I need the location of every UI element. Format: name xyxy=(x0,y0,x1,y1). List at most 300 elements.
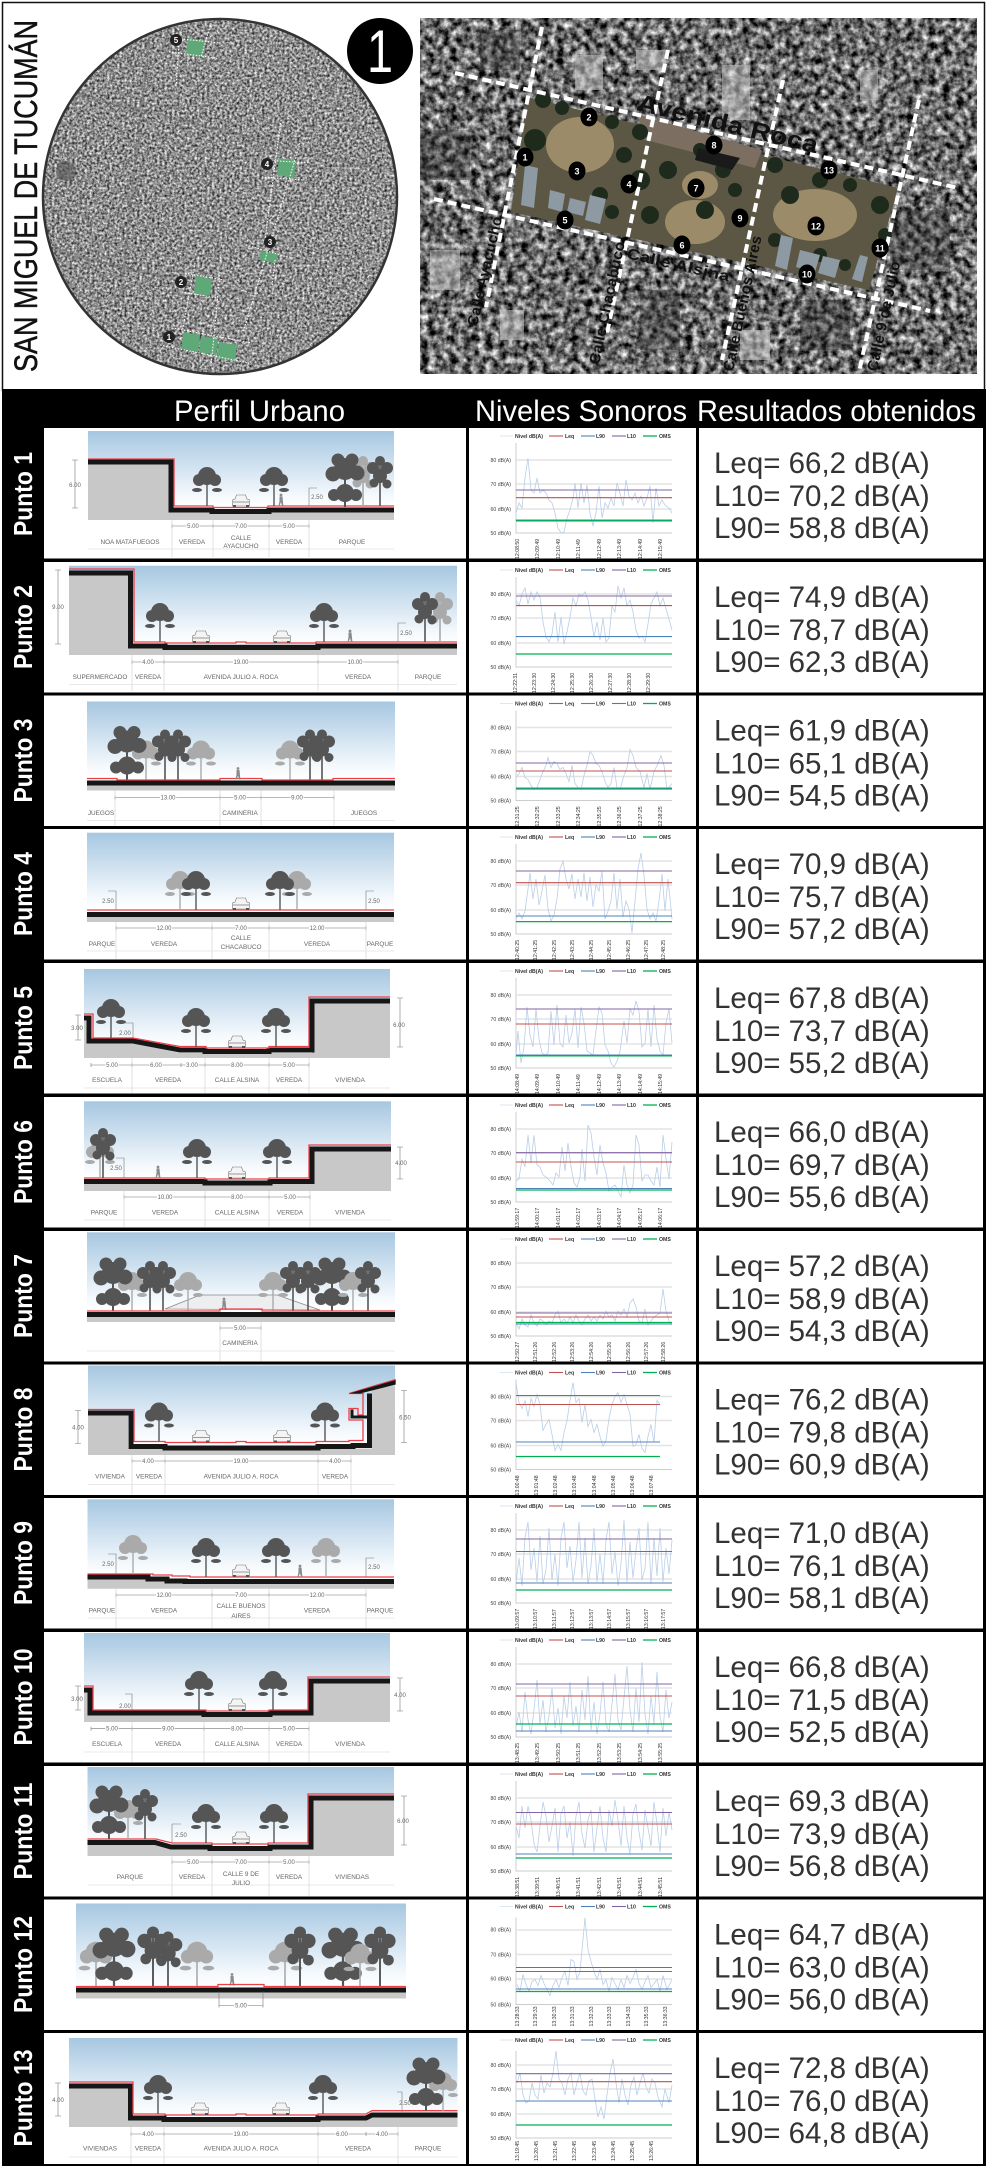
sound level chart 3: 12:32:25 xyxy=(535,806,541,826)
sound level chart 4: 12:44:25 xyxy=(589,940,595,960)
sound level chart 8: 13:07:48 xyxy=(649,1475,655,1496)
sound level chart 12: 80 dB(A) xyxy=(491,1928,511,1934)
sound level chart 2: 12:29:30 xyxy=(646,673,652,693)
results 11: L90= 56,8 dB(A) xyxy=(714,1850,930,1883)
urban profile 10: VIVIENDA xyxy=(335,1741,366,1748)
sound level chart 8: L90 xyxy=(596,1370,605,1376)
results 4: L90= 57,2 dB(A) xyxy=(714,913,930,946)
sound level chart 13: 13:19:45 xyxy=(515,2141,521,2161)
urban profile 2: 9.00 xyxy=(52,605,64,611)
urban profile 6: 2.50 xyxy=(110,1166,122,1172)
results 3 xyxy=(699,696,983,826)
sound level chart 5: 14:11:49 xyxy=(576,1074,582,1094)
urban profile 4: 12.00 xyxy=(309,926,325,932)
sound level chart 7: 12:54:26 xyxy=(589,1342,595,1362)
header row: Perfil Urbano xyxy=(174,395,345,428)
sound level chart 13: 13:25:45 xyxy=(630,2141,636,2161)
sound level chart 9: 13:12:57 xyxy=(570,1609,576,1629)
urban profile 12 xyxy=(44,1900,466,2030)
urban profile 2: VEREDA xyxy=(135,674,162,681)
sound level chart 4: 12:41:25 xyxy=(533,940,539,960)
urban profile 3 xyxy=(44,696,466,826)
urban profile 2: AVENIDA JULIO A. ROCA xyxy=(204,674,279,681)
sound level chart 12: 60 dB(A) xyxy=(491,1976,511,1982)
urban profile 10: 3.00 xyxy=(71,1697,83,1703)
row: Punto 8 xyxy=(8,1364,983,1496)
urban profile 6 xyxy=(44,1097,466,1228)
urban profile 1: 6.00 xyxy=(69,483,81,489)
sound level chart 3: L10 xyxy=(627,702,636,708)
urban profile 9: 12.00 xyxy=(156,1593,172,1599)
sound level chart 6: Leq xyxy=(565,1103,574,1109)
aerial map xyxy=(420,18,977,374)
urban profile 1: PARQUE xyxy=(339,539,365,546)
sound level chart 11: 60 dB(A) xyxy=(491,1845,511,1851)
sound level chart 11: 13:43:51 xyxy=(617,1877,623,1897)
results 12 xyxy=(699,1900,983,2030)
row: Punto 1: Punto 1 xyxy=(8,452,38,536)
sound level chart 1: Leq xyxy=(565,434,574,440)
sound level chart 1: 12:13:49 xyxy=(617,539,623,559)
urban profile 6: 4.00 xyxy=(395,1161,407,1167)
results 4: Leq= 70,9 dB(A) xyxy=(714,848,930,881)
sound level chart 4: 12:47:25 xyxy=(644,940,650,960)
sound level chart 6: 14:03:17 xyxy=(597,1208,603,1228)
sound level chart 3: 12:34:25 xyxy=(576,806,582,826)
sound level chart 9: 13:11:57 xyxy=(552,1609,558,1629)
sound level chart 11: 50 dB(A) xyxy=(491,1869,511,1875)
urban profile 8: AVENIDA JULIO A. ROCA xyxy=(204,1474,279,1480)
aerial markers: 7 xyxy=(693,184,699,194)
sound level chart 10: Nivel dB(A) xyxy=(515,1638,543,1644)
results 12: L10= 63,0 dB(A) xyxy=(714,1952,930,1984)
urban profile 2: PARQUE xyxy=(415,674,441,681)
sound level chart 13: 13:22:45 xyxy=(572,2141,578,2161)
street names: Calle Ayacucho xyxy=(464,215,506,328)
sound level chart 5: 14:10:49 xyxy=(556,1074,562,1094)
sound level chart 5: L90 xyxy=(596,969,605,975)
sound level chart 6: 13:59:17 xyxy=(515,1208,521,1228)
sound level chart 2: 12:25:30 xyxy=(570,673,576,693)
sound level chart 12: 13:35:33 xyxy=(644,2006,650,2026)
results 11: L10= 73,9 dB(A) xyxy=(714,1818,930,1851)
sound level chart 5: Leq xyxy=(565,969,574,975)
sound level chart 11: Nivel dB(A) xyxy=(515,1772,543,1778)
row: Punto 11 xyxy=(8,1766,983,1897)
street names: Avenida Roca xyxy=(635,90,822,159)
urban profile 5: 8.00 xyxy=(231,1063,243,1069)
sound level chart 1: 50 dB(A) xyxy=(491,531,511,537)
urban profile 5: 2.00 xyxy=(119,1031,131,1037)
sound level chart 11: 13:38:51 xyxy=(515,1877,521,1897)
sound level chart 7: 50 dB(A) xyxy=(491,1334,511,1340)
urban profile 2: VEREDA xyxy=(345,674,372,681)
header row: Resultados obtenidos xyxy=(697,395,976,428)
sound level chart 1: 12:10:49 xyxy=(556,539,562,559)
urban profile 1: VEREDA xyxy=(276,539,303,546)
urban profile 2: 19.00 xyxy=(233,660,249,666)
urban profile 4: 2.50 xyxy=(102,899,114,905)
sound level chart 7: L10 xyxy=(627,1237,636,1243)
sound level chart 8: 13:01:48 xyxy=(534,1475,540,1496)
sound level chart 13: L10 xyxy=(627,2038,636,2044)
sound level chart 9: 80 dB(A) xyxy=(491,1528,511,1534)
urban profile 3: CAMINERIA xyxy=(222,810,258,817)
sound level chart 12: 13:34:33 xyxy=(626,2006,632,2026)
sound level chart 2: 12:26:30 xyxy=(589,673,595,693)
row: Punto 6 xyxy=(8,1097,983,1228)
sound level chart 3: 12:31:25 xyxy=(515,806,521,826)
urban profile 9 xyxy=(44,1498,466,1628)
urban profile 5: 6.00 xyxy=(150,1063,162,1069)
results 7: Leq= 57,2 dB(A) xyxy=(714,1250,930,1283)
results 1: Leq= 66,2 dB(A) xyxy=(714,447,930,480)
results 5: L90= 55,2 dB(A) xyxy=(714,1047,930,1080)
results 13: Leq= 72,8 dB(A) xyxy=(714,2052,930,2085)
row: Punto 10 xyxy=(8,1632,983,1763)
sound level chart 1: 12:14:49 xyxy=(638,539,644,559)
sound level chart 9: Leq xyxy=(565,1504,574,1510)
aerial markers: 6 xyxy=(679,240,685,250)
sound level chart 2: 50 dB(A) xyxy=(491,665,511,671)
row: Punto 8: Punto 8 xyxy=(8,1388,38,1472)
sound level chart 10: OMS xyxy=(659,1638,671,1644)
sound level chart 12: L10 xyxy=(627,1904,636,1910)
results 9: L10= 76,1 dB(A) xyxy=(714,1550,930,1583)
aerial markers: 11 xyxy=(875,244,885,254)
header row xyxy=(174,395,976,428)
sound level chart 1: L10 xyxy=(627,434,636,440)
sound level chart 11: L10 xyxy=(627,1772,636,1778)
urban profile 11: PARQUE xyxy=(117,1874,143,1881)
sound level chart 11: 13:42:51 xyxy=(597,1877,603,1897)
row: Punto 13 xyxy=(8,2033,983,2164)
sound level chart 2: 60 dB(A) xyxy=(491,641,511,647)
sound level chart 8: 50 dB(A) xyxy=(491,1468,511,1474)
sound level chart 13: 50 dB(A) xyxy=(491,2136,511,2142)
sound level chart 10: 13:49:25 xyxy=(535,1743,541,1763)
sound level chart 4: 12:42:25 xyxy=(552,940,558,960)
sound level chart 7: Nivel dB(A) xyxy=(515,1237,543,1243)
urban profile 7 xyxy=(44,1231,466,1362)
sound level chart 9: 50 dB(A) xyxy=(491,1601,511,1607)
sound level chart 12: 50 dB(A) xyxy=(491,2002,511,2008)
results 10 xyxy=(699,1632,983,1762)
urban profile 13: 4.00 xyxy=(376,2132,388,2138)
results 7 xyxy=(699,1231,983,1362)
sound level chart 4: 12:48:25 xyxy=(661,940,667,960)
row: Punto 7 xyxy=(8,1231,983,1362)
urban profile 4: PARQUE xyxy=(89,941,115,948)
street lines xyxy=(434,27,958,372)
sound level chart 1: 60 dB(A) xyxy=(491,507,511,513)
sound level chart 2: OMS xyxy=(659,568,671,574)
sound level chart 6: L90 xyxy=(596,1103,605,1109)
urban profile 10: 2.00 xyxy=(119,1704,131,1710)
sound level chart 6: 14:06:17 xyxy=(658,1208,664,1228)
sound level chart 13: Leq xyxy=(565,2038,574,2044)
sound level chart 5: 60 dB(A) xyxy=(491,1042,511,1048)
urban profile 1: 7.00 xyxy=(235,524,247,530)
sound level chart 10: 13:52:25 xyxy=(597,1743,603,1763)
urban profile 8: 4.00 xyxy=(142,1459,154,1465)
sound level chart 12: OMS xyxy=(659,1904,671,1910)
urban profile 11: 7.00 xyxy=(235,1860,247,1866)
sound level chart 10: 13:50:25 xyxy=(556,1743,562,1763)
sound level chart 10: L10 xyxy=(627,1638,636,1644)
aerial markers: 1 xyxy=(522,152,528,162)
urban profile 13: 19.00 xyxy=(233,2132,249,2138)
urban profile 4: 7.00 xyxy=(235,926,247,932)
urban profile 10: 9.00 xyxy=(162,1727,174,1733)
results 6 xyxy=(699,1097,983,1228)
sound level chart 6: 14:00:17 xyxy=(535,1208,541,1228)
urban profile 13: VEREDA xyxy=(135,2146,162,2153)
urban profile 1: CALLE xyxy=(231,535,251,542)
street names: Calle 9 de Julio xyxy=(864,260,904,373)
sound level chart 13: 70 dB(A) xyxy=(491,2087,511,2093)
sound level chart 2: 12:27:30 xyxy=(608,673,614,693)
results 4 xyxy=(699,829,983,960)
urban profile 8: 4.00 xyxy=(72,1426,84,1432)
sound level chart 6: 70 dB(A) xyxy=(491,1151,511,1157)
sound level chart 3: 12:37:25 xyxy=(638,806,644,826)
sound level chart 10: 13:55:25 xyxy=(658,1743,664,1763)
row: Punto 6: Punto 6 xyxy=(8,1120,38,1204)
sound level chart 3 xyxy=(469,696,696,826)
sound level chart 9: 13:14:57 xyxy=(607,1609,613,1629)
sound level chart 9: 13:16:57 xyxy=(644,1609,650,1629)
row: Punto 7: Punto 7 xyxy=(8,1254,38,1338)
sound level chart 3: 70 dB(A) xyxy=(491,750,511,756)
sound level chart 3: Leq xyxy=(565,702,574,708)
urban profile 9: VEREDA xyxy=(304,1608,331,1614)
results 4: L10= 75,7 dB(A) xyxy=(714,881,930,914)
sound level chart 2: 12:22:31 xyxy=(513,673,519,693)
sound level chart 3: OMS xyxy=(659,702,671,708)
sound level chart 9: 70 dB(A) xyxy=(491,1552,511,1558)
urban profile 5: CALLE ALSINA xyxy=(215,1077,260,1084)
row: Punto 2: Punto 2 xyxy=(8,585,38,669)
results 9 xyxy=(699,1498,983,1628)
sound level chart 12: 13:29:33 xyxy=(533,2006,539,2026)
results 5: Leq= 67,8 dB(A) xyxy=(714,982,930,1015)
results 11: Leq= 69,3 dB(A) xyxy=(714,1785,930,1818)
sound level chart 2: 12:28:30 xyxy=(627,673,633,693)
sound level chart 5: 14:13:49 xyxy=(617,1074,623,1094)
sound level chart 8: OMS xyxy=(659,1370,671,1376)
sound level chart 13: 13:23:45 xyxy=(592,2141,598,2161)
urban profile 1: NOA MATAFUEGOS xyxy=(100,539,160,546)
panel: location maps xyxy=(2,2,984,390)
sound level chart 13: 13:21:45 xyxy=(553,2141,559,2161)
sound level chart 1: 12:15:49 xyxy=(658,539,664,559)
sound level chart 11: 13:41:51 xyxy=(576,1877,582,1897)
urban profile 3: 9.00 xyxy=(291,796,303,802)
row: Punto 2 xyxy=(8,562,983,693)
sound level chart 9: 13:10:57 xyxy=(533,1609,539,1629)
sound level chart 8: 13:02:48 xyxy=(553,1475,559,1496)
sound level chart 3: L90 xyxy=(596,702,605,708)
sound level chart 3: 12:35:25 xyxy=(597,806,603,826)
sound level chart 9: 13:15:57 xyxy=(626,1609,632,1629)
urban profile 4: 12.00 xyxy=(156,926,172,932)
aerial markers: 4 xyxy=(626,180,632,190)
sound level chart 11: 13:44:51 xyxy=(638,1877,644,1897)
results 3: Leq= 61,9 dB(A) xyxy=(714,714,930,748)
urban profile 6: 8.00 xyxy=(231,1195,243,1201)
urban profile 10: 5.00 xyxy=(106,1727,118,1733)
sound level chart 2 xyxy=(469,562,696,693)
sound level chart 7: 12:57:26 xyxy=(644,1342,650,1362)
row: Punto 3 xyxy=(8,696,983,826)
urban profile 10: 5.00 xyxy=(283,1727,295,1733)
sound level chart 5: 14:14:49 xyxy=(638,1074,644,1094)
sound level chart 11: 70 dB(A) xyxy=(491,1820,511,1826)
urban profile 4: VEREDA xyxy=(151,941,178,948)
results 5: L10= 73,7 dB(A) xyxy=(714,1015,930,1048)
sound level chart 7: 70 dB(A) xyxy=(491,1285,511,1291)
urban profile 9: VEREDA xyxy=(151,1608,178,1614)
sound level chart 13: Nivel dB(A) xyxy=(515,2038,543,2044)
sound level chart 7: 12:56:26 xyxy=(626,1342,632,1362)
sound level chart 6: 50 dB(A) xyxy=(491,1200,511,1206)
results 8: L90= 60,9 dB(A) xyxy=(714,1448,930,1482)
urban profile 8: VIVIENDA xyxy=(95,1474,126,1480)
results 9: L90= 58,1 dB(A) xyxy=(714,1582,930,1615)
results 12: Leq= 64,7 dB(A) xyxy=(714,1918,930,1952)
urban profile 10: ESCUELA xyxy=(92,1741,123,1748)
sound level chart 10: 60 dB(A) xyxy=(491,1711,511,1717)
results 13: L90= 64,8 dB(A) xyxy=(714,2117,930,2150)
urban profile 5: VEREDA xyxy=(155,1077,182,1084)
urban profile 13: 4.00 xyxy=(52,2098,64,2104)
sound level chart 13: 80 dB(A) xyxy=(491,2063,511,2069)
urban profile 11: 2.50 xyxy=(175,1833,187,1839)
urban profile 4: CALLE xyxy=(231,935,251,942)
sound level chart 12 xyxy=(469,1900,696,2030)
aerial markers xyxy=(516,108,888,284)
urban profile 5: 3.00 xyxy=(71,1026,83,1032)
city map markers xyxy=(163,34,276,343)
urban profile 11: 5.00 xyxy=(187,1860,199,1866)
aerial markers: 8 xyxy=(711,140,717,150)
sound level chart 7: Leq xyxy=(565,1237,574,1243)
sound level chart 9: OMS xyxy=(659,1504,671,1510)
sound level chart 12: 13:33:33 xyxy=(607,2006,613,2026)
sound level chart 4: OMS xyxy=(659,835,671,841)
urban profile 9: 7.00 xyxy=(235,1593,247,1599)
sound level chart 9: L10 xyxy=(627,1504,636,1510)
sound level chart 1: 12:11:49 xyxy=(576,539,582,559)
sound level chart 3: 12:38:25 xyxy=(658,806,664,826)
urban profile 10: 8.00 xyxy=(231,1727,243,1733)
results 5 xyxy=(699,963,983,1094)
sound level chart 4: 70 dB(A) xyxy=(491,883,511,889)
urban profile 8: 6.50 xyxy=(399,1416,411,1422)
urban profile 9: AIRES xyxy=(231,1613,251,1620)
sound level chart 10: 13:53:25 xyxy=(617,1743,623,1763)
sound level chart 10: Leq xyxy=(565,1638,574,1644)
sound level chart 7 xyxy=(469,1231,696,1362)
sound level chart 12: Nivel dB(A) xyxy=(515,1904,543,1910)
sound level chart 10: 13:54:25 xyxy=(638,1743,644,1763)
results 3: L90= 54,5 dB(A) xyxy=(714,780,930,812)
sound level chart 7: L90 xyxy=(596,1237,605,1243)
urban profile 5: 3.00 xyxy=(186,1063,198,1069)
urban profile 5: ESCUELA xyxy=(92,1077,123,1084)
urban profile 9: CALLE BUENOS xyxy=(216,1603,266,1610)
sound level chart 8: 70 dB(A) xyxy=(491,1418,511,1424)
urban profile 9: PARQUE xyxy=(89,1608,115,1614)
sound level chart 7: 12:55:26 xyxy=(607,1342,613,1362)
urban profile 13: 2.50 xyxy=(399,2101,411,2107)
sound level chart 6: 14:01:17 xyxy=(556,1208,562,1228)
sound level chart 3: 80 dB(A) xyxy=(491,726,511,732)
sound level chart 7: 12:52:26 xyxy=(552,1342,558,1362)
sound level chart 11: 13:40:51 xyxy=(556,1877,562,1897)
sound level chart 2: L10 xyxy=(627,568,636,574)
sound level chart 10: 50 dB(A) xyxy=(491,1735,511,1741)
sound level chart 11: 13:45:51 xyxy=(658,1877,664,1897)
sound level chart 10: 80 dB(A) xyxy=(491,1662,511,1668)
sound level chart 6: OMS xyxy=(659,1103,671,1109)
sound level chart 4: 12:45:25 xyxy=(607,940,613,960)
urban profile 9: 2.50 xyxy=(368,1565,380,1571)
sound level chart 10: L90 xyxy=(596,1638,605,1644)
street names xyxy=(464,90,904,373)
urban profile 6: PARQUE xyxy=(91,1210,117,1216)
sound level chart 1: 12:09:49 xyxy=(535,539,541,559)
urban profile 2 xyxy=(44,562,466,692)
sound level chart 3: 50 dB(A) xyxy=(491,798,511,804)
sound level chart 12: 13:36:33 xyxy=(663,2006,669,2026)
sound level chart 11: L90 xyxy=(596,1772,605,1778)
urban profile 6: VIVIENDA xyxy=(335,1210,366,1216)
sound level chart 7: OMS xyxy=(659,1237,671,1243)
sound level chart 2: 12:24:30 xyxy=(551,673,557,693)
urban profile 8: 4.00 xyxy=(329,1459,341,1465)
sound level chart 1: 70 dB(A) xyxy=(491,482,511,488)
sound level chart 8: 13:03:48 xyxy=(572,1475,578,1496)
sound level chart 8: L10 xyxy=(627,1370,636,1376)
sound level chart 6: 60 dB(A) xyxy=(491,1176,511,1182)
results 2: L10= 78,7 dB(A) xyxy=(714,614,930,647)
sound level chart 4: L90 xyxy=(596,835,605,841)
urban profile 12: 5.00 xyxy=(235,2004,247,2010)
sound level chart 4: L10 xyxy=(627,835,636,841)
urban profile 4: CHACABUCO xyxy=(221,944,261,951)
urban profile 13: 4.00 xyxy=(142,2132,154,2138)
urban profile 5: VIVIENDA xyxy=(335,1077,366,1084)
sound level chart 13: 13:26:45 xyxy=(649,2141,655,2161)
sound level chart 6: 14:04:17 xyxy=(617,1208,623,1228)
sound level chart 2: Leq xyxy=(565,568,574,574)
sound level chart 13: OMS xyxy=(659,2038,671,2044)
results 10: L90= 52,5 dB(A) xyxy=(714,1716,930,1749)
city map markers: 2 xyxy=(179,278,184,287)
urban profile 2: 10.00 xyxy=(347,660,363,666)
row: Punto 9: Punto 9 xyxy=(8,1521,38,1605)
row: Punto 3: Punto 3 xyxy=(8,718,38,802)
results 1: L90= 58,8 dB(A) xyxy=(714,512,930,545)
results 8 xyxy=(699,1364,983,1495)
results 8: L10= 79,8 dB(A) xyxy=(714,1416,930,1450)
sound level chart 6: 80 dB(A) xyxy=(491,1127,511,1133)
circular city map xyxy=(40,15,400,380)
urban profile 4 xyxy=(44,829,466,960)
park buildings xyxy=(521,165,868,282)
